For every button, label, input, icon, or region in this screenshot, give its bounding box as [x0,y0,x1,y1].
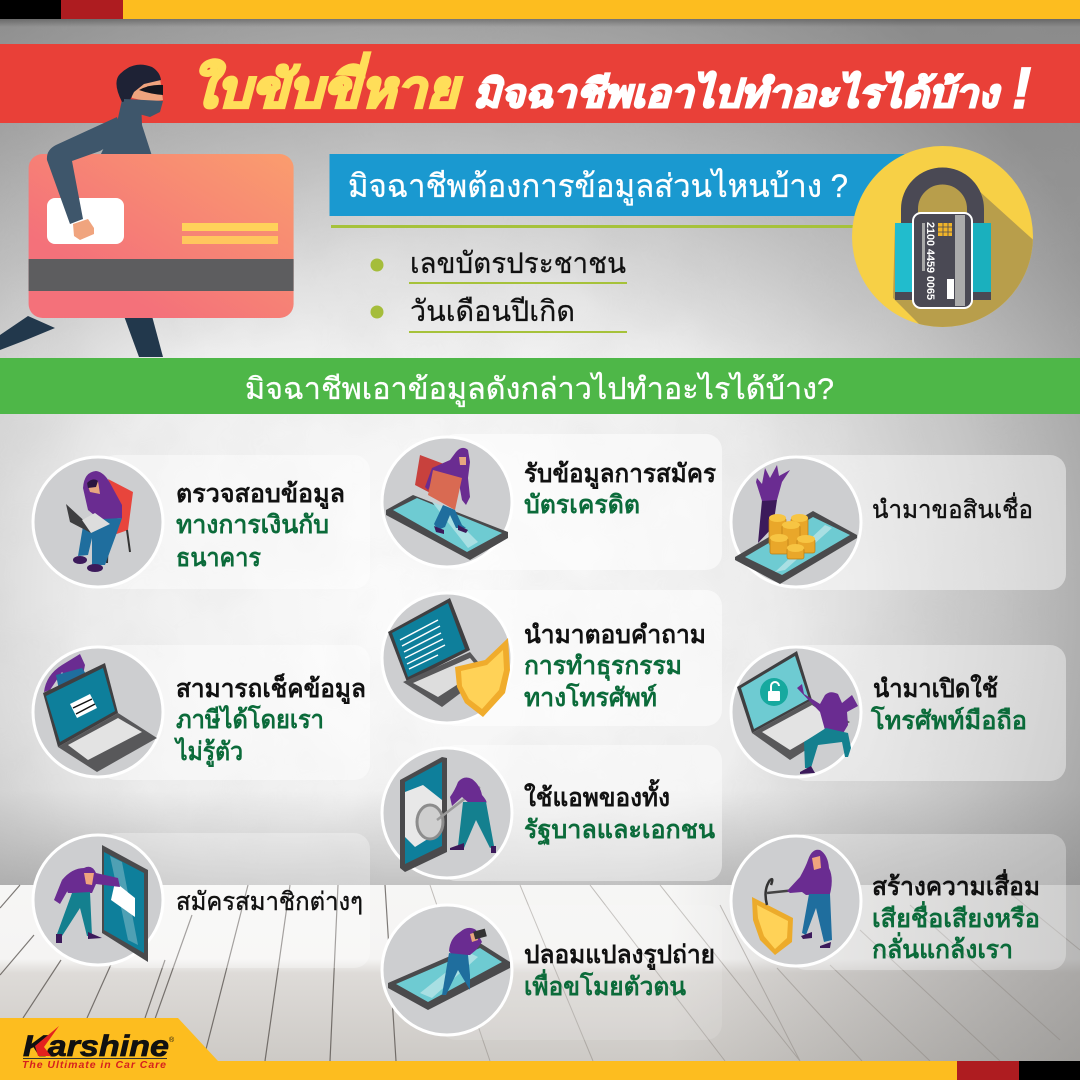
text: ปลอมแปลงรูปถ่าย [524,941,715,971]
face cover [124,99,163,117]
front leg [124,316,163,357]
hair [116,65,161,102]
text [870,673,1027,735]
face [130,78,163,102]
Karshine logo: Karshine [23,1030,169,1063]
text: ตรวจสอบข้อมูล [176,480,345,510]
background: wooden floor [0,885,1080,1061]
title: white part: มิจฉาชีพเอาไปทำอะไรได้บ้าง [473,71,1001,116]
item: receive credit card application data [382,434,722,570]
item: forge photos to steal identity [382,905,722,1040]
text: บัตรเครดิต [524,491,640,519]
text: ไม่รู้ตัว [173,736,243,768]
item: answer phone transaction questions [382,590,722,726]
question bar [330,154,904,216]
text: เสียชื่อเสียงหรือ [872,901,1040,933]
credit card [29,154,294,318]
text [524,941,715,1001]
text [176,480,345,572]
arm [47,117,122,224]
item: damage reputation or harass [731,834,1066,970]
text: สมัครสมาชิกต่างๆ [176,888,363,916]
text [173,673,366,768]
top colour bar [0,0,1080,27]
list: date of birth [370,296,627,333]
text: โทรศัพท์มือถือ [870,705,1027,735]
text: ทางการเงินกับ [176,511,329,539]
back leg [0,316,55,350]
list: ID card number: เลขบัตรประชาชน [410,248,626,280]
list: date of birth: วันเดือนปีเกิด [410,296,575,328]
Karshine logo [0,1018,218,1080]
divider under question [331,225,861,228]
item: open mobile phone lines [731,645,1066,781]
text: สร้างความเสื่อม [872,869,1040,901]
Karshine logo: ® [169,1036,175,1044]
text: นำมาตอบคำถาม [524,621,706,649]
text: ภาษีได้โดยเรา [176,704,324,734]
text [524,778,715,846]
question bar: มิจฉาชีพต้องการข้อมูลส่วนไหนบ้าง ? [348,168,848,206]
text: สามารถเช็คข้อมูล [176,673,366,705]
text: กลั่นแกล้งเรา [872,932,1013,964]
card number: 2100 4459 0065 [924,222,936,300]
text: ธนาคาร [176,544,262,572]
title: yellow part: ใบขับขี่หาย [190,52,463,119]
text: ใช้แอพของทั้ง [524,778,670,812]
text [524,621,706,712]
item: apply for loans [731,455,1066,590]
text [872,869,1040,964]
icon: padlock with bank card [852,146,1033,327]
text: นำมาขอสินเชื่อ [872,492,1033,524]
item: sign up for memberships [33,833,370,968]
section heading bar [0,358,1080,414]
text: ทางโทรศัพท์ [524,682,657,712]
thief carrying a giant card [0,65,294,357]
item: check bank financial data [33,455,370,589]
title: exclamation mark: ! [1012,56,1031,121]
mask over eyes [139,85,163,95]
text [524,460,717,519]
text: การทำธุรกรรม [524,652,682,682]
text: นำมาเปิดใช้ [873,673,998,703]
hand [73,219,94,240]
bottom colour bar [0,1061,1080,1080]
torso [100,100,152,156]
text: เพื่อขโมยตัวตน [524,969,686,1001]
text: รัฐบาลและเอกชน [524,816,715,846]
Karshine logo: The Ultimate in Car Care [22,1059,166,1071]
item: check tax data without us knowing [33,645,370,780]
item: use government and private apps [382,745,722,881]
text: รับข้อมูลการสมัคร [524,460,717,490]
title banner [0,44,1080,123]
section heading bar: มิจฉาชีพเอาข้อมูลดังกล่าวไปทำอะไรได้บ้าง? [245,371,834,407]
